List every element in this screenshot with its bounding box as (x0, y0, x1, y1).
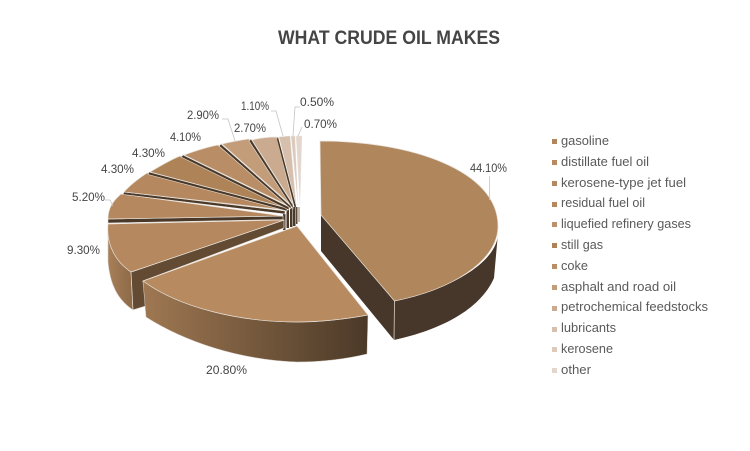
title: WHAT CRUDE OIL MAKES (278, 28, 500, 49)
legend: still gas: still gas (561, 238, 603, 252)
data labels: 0.50% (300, 95, 334, 109)
legend: gasoline: gasoline (561, 134, 609, 148)
slice: kerosene 0.50% (291, 136, 298, 205)
slice: residual fuel oil 5.20% (108, 194, 283, 223)
data labels: 9.30% (67, 243, 100, 257)
legend: coke: coke (561, 259, 588, 273)
slice: distillate fuel oil 20.80% (143, 226, 368, 362)
legend (552, 134, 708, 377)
data labels: 2.70% (234, 121, 266, 135)
legend: kerosene-type jet fuel: kerosene-type jet fuel (561, 176, 686, 190)
slice: liquefied refinery gases 4.30% (123, 173, 285, 214)
slice: gasoline 44.10% (320, 141, 498, 340)
slice: other 0.70% (296, 136, 302, 205)
data labels: 1.10% (241, 99, 269, 113)
legend: petrochemical feedstocks: petrochemical feedstocks (561, 300, 708, 314)
data labels (67, 95, 507, 377)
legend: other: other (561, 363, 591, 377)
center walls of small slices (283, 207, 300, 230)
slice: kerosene-type jet fuel 9.30% (108, 220, 284, 310)
data labels: 20.80% (206, 363, 247, 377)
slice: asphalt and road oil 2.90% (219, 139, 291, 209)
leader lines (105, 107, 490, 206)
slice: lubricants 1.10% (277, 136, 296, 209)
slice: still gas 4.30% (148, 156, 287, 211)
legend: residual fuel oil: residual fuel oil (561, 196, 645, 210)
data labels: 4.30% (132, 146, 165, 160)
data labels: 0.70% (304, 117, 337, 131)
legend: kerosene: kerosene (561, 342, 613, 356)
slice: coke 4.10% (181, 145, 289, 210)
legend: liquefied refinery gases: liquefied refinery gases (561, 217, 691, 231)
data labels: 4.30% (101, 162, 134, 176)
data labels: 4.10% (170, 130, 201, 144)
legend: lubricants: lubricants (561, 321, 616, 335)
data labels: 44.10% (470, 161, 507, 175)
data labels: 2.90% (187, 108, 219, 122)
legend: distillate fuel oil: distillate fuel oil (561, 155, 649, 169)
pie chart (108, 136, 498, 362)
legend: asphalt and road oil: asphalt and road oil (561, 280, 676, 294)
slice: petrochemical feedstocks 2.70% (249, 137, 293, 209)
data labels: 5.20% (72, 190, 105, 204)
